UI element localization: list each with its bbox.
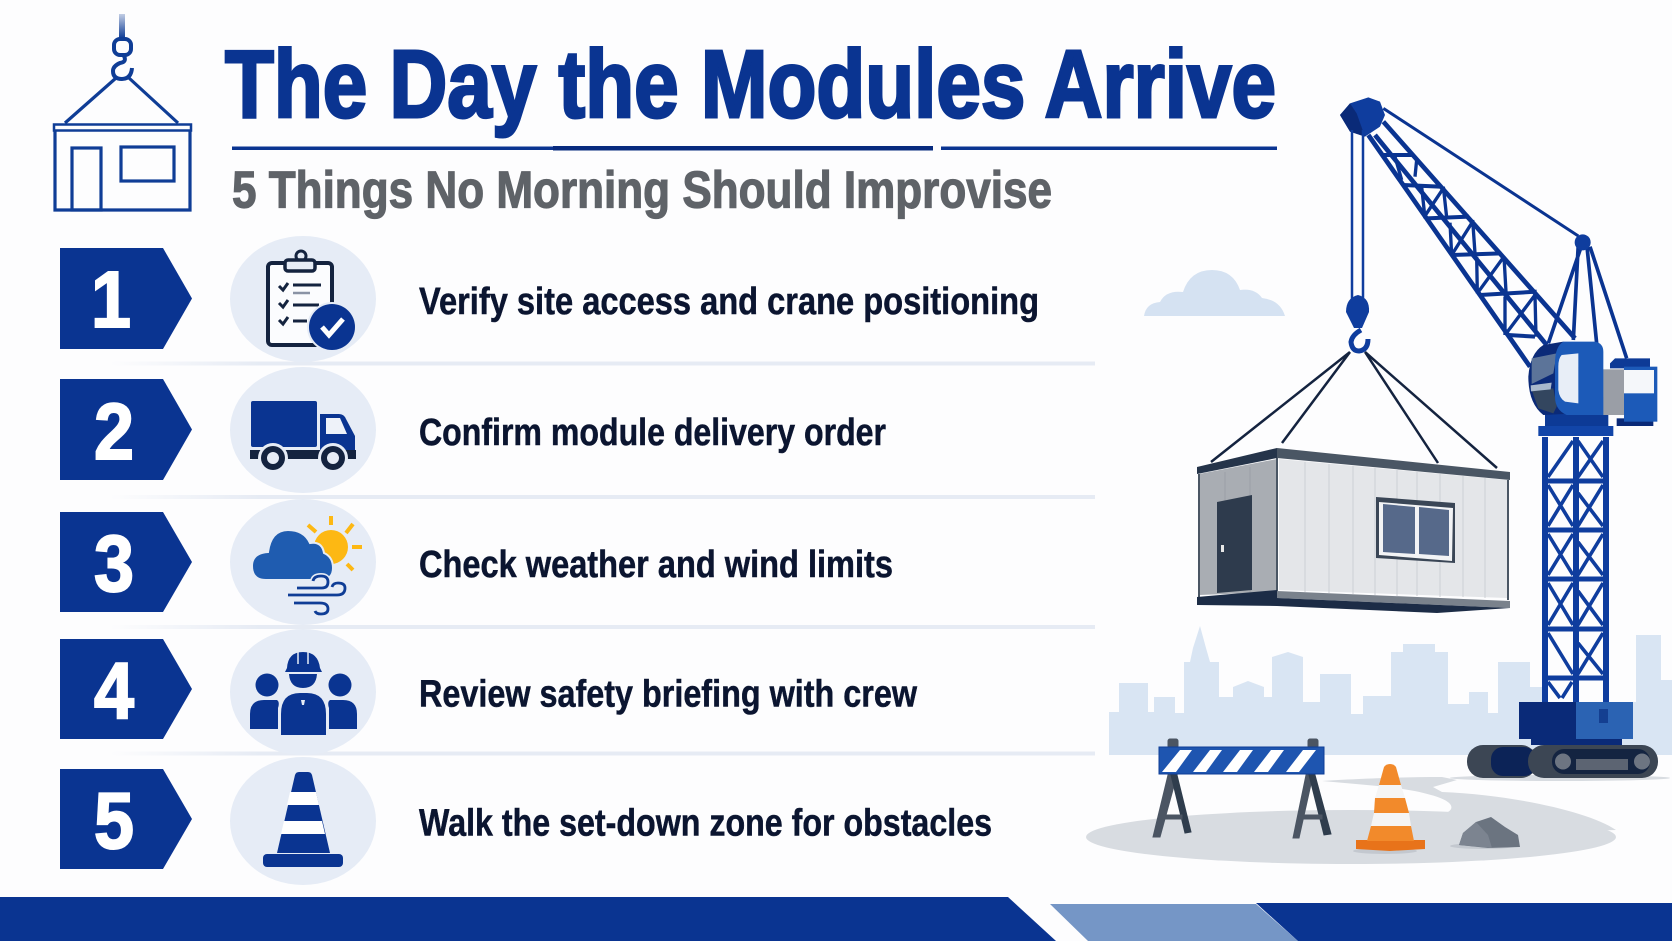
crane boom lattice — [1368, 108, 1627, 367]
icon: clipboard with check — [230, 236, 376, 362]
crane mast — [1545, 437, 1606, 702]
badge 3 — [60, 512, 192, 612]
icon: cloud, sun and wind — [230, 499, 376, 625]
crane mast stays — [1548, 242, 1627, 358]
step 3 text: Check weather and wind limits — [419, 544, 893, 586]
barrier board — [1159, 747, 1324, 774]
title rule — [232, 146, 1277, 150]
badge 4 — [60, 639, 192, 739]
city skyline — [1109, 626, 1672, 755]
hoist cables and hook block — [1346, 130, 1369, 351]
crane cab and counterweight — [1528, 342, 1657, 436]
module door — [1217, 495, 1252, 593]
badge 5: 5 — [94, 776, 134, 865]
badge 2 — [60, 379, 192, 480]
orange traffic cone — [1353, 764, 1425, 854]
module window — [1376, 497, 1455, 563]
row 2: module delivery order — [60, 367, 886, 493]
step 1 text: Verify site access and crane positioning — [419, 281, 1039, 323]
suspended module — [1197, 448, 1510, 613]
slings — [1211, 352, 1497, 468]
bottom band — [0, 897, 1672, 941]
row dividers — [110, 362, 1095, 756]
module roof frame — [1197, 448, 1277, 474]
crane crawler base — [1450, 702, 1670, 781]
barrier legs — [1153, 739, 1331, 838]
step 4 text: Review safety briefing with crew — [419, 674, 917, 716]
step 2 text: Confirm module delivery order — [419, 412, 886, 454]
badge 1: 1 — [91, 255, 131, 344]
badge 4: 4 — [94, 646, 134, 735]
badge 2: 2 — [94, 387, 134, 476]
crane — [1340, 97, 1670, 781]
row 3: weather and wind — [60, 499, 893, 625]
row 4: safety briefing — [60, 629, 917, 755]
row 1: verify site access — [60, 236, 1039, 362]
badge 3: 3 — [94, 519, 134, 608]
step 5 text: Walk the set-down zone for obstacles — [419, 802, 992, 844]
barrier — [1153, 739, 1331, 838]
icon: crew with hard hat — [230, 629, 376, 755]
icon: module hanging from hook — [54, 14, 191, 210]
crane boom head — [1340, 97, 1591, 250]
module floor frame — [1197, 590, 1277, 606]
title: The Day the Modules Arrive — [225, 31, 1276, 138]
badge 5 — [60, 769, 192, 869]
ground patch and path — [1086, 777, 1616, 864]
subtitle: 5 Things No Morning Should Improvise — [232, 162, 1052, 220]
icon: traffic cone — [230, 757, 376, 885]
badge 1 — [60, 248, 192, 349]
crane pendant cable — [1383, 108, 1578, 236]
cloud — [1144, 270, 1285, 316]
row 5: set-down zone — [60, 757, 992, 885]
icon: delivery truck — [230, 367, 376, 493]
rock — [1450, 817, 1520, 849]
